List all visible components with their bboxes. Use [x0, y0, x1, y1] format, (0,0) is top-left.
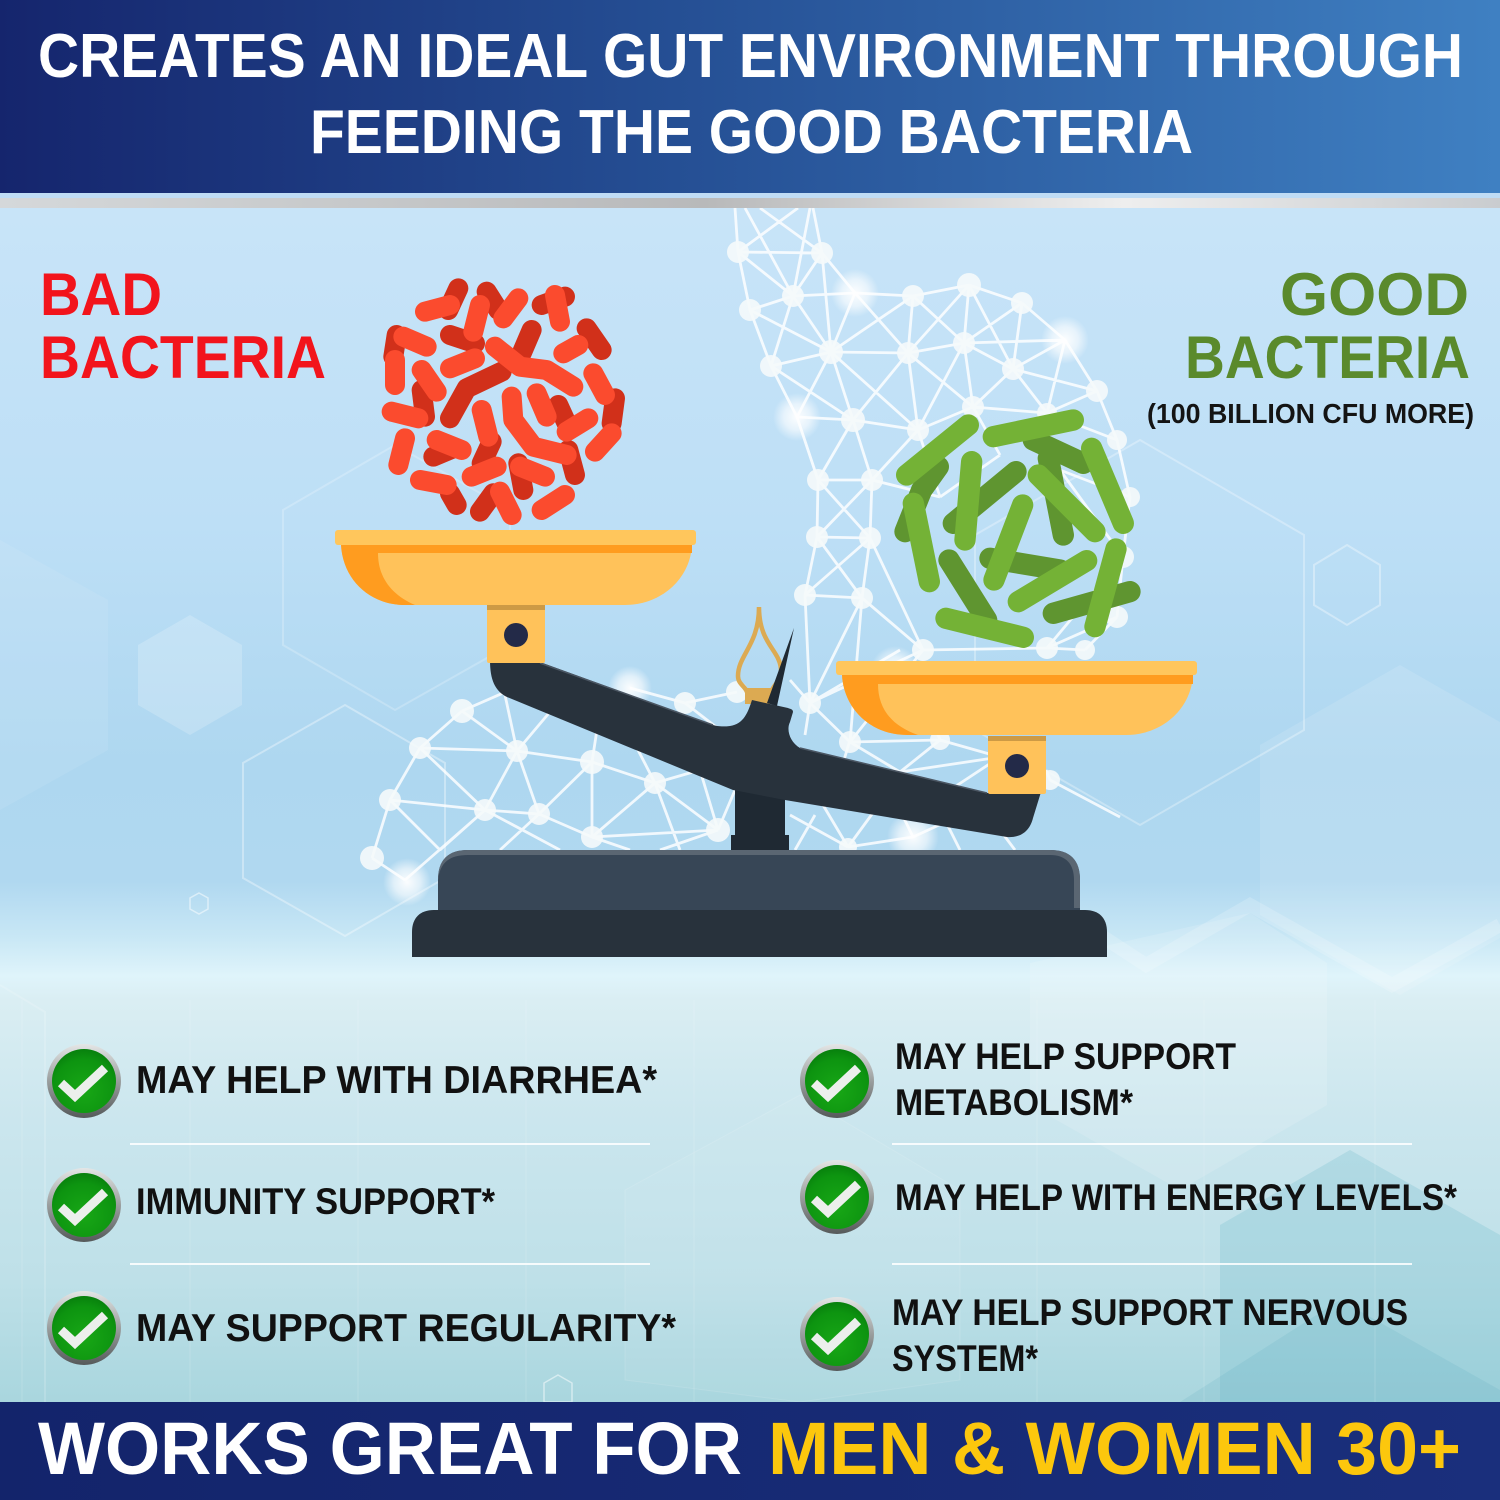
- heading: bad bacteria: BACTERIA: [40, 324, 326, 391]
- beam edge highlight: [540, 663, 987, 793]
- heading: good bacteria: BACTERIA: [1185, 324, 1470, 391]
- gold pointer base: [745, 688, 772, 704]
- illustration: balance scale: [335, 530, 1197, 957]
- left pan mount: [487, 605, 545, 663]
- item: metabolism: [800, 1036, 1236, 1123]
- beam: [490, 660, 1041, 837]
- heading: good bacteria: [1147, 261, 1474, 429]
- title: [38, 22, 1463, 167]
- scale base lower: [412, 910, 1107, 957]
- light strip under header: [0, 193, 1500, 198]
- footer text: [38, 1407, 1461, 1490]
- benefits list: right column: [800, 1036, 1458, 1379]
- item: regularity: [47, 1291, 677, 1365]
- heading: good bacteria: GOOD: [1280, 261, 1469, 328]
- item: nervous system: SYSTEM*: [892, 1338, 1039, 1379]
- item: energy: [800, 1160, 1458, 1234]
- benefits list: left column: [47, 1044, 677, 1365]
- silver divider band: [0, 198, 1500, 208]
- background: molecular network gut shape: [360, 208, 1140, 906]
- gold pointer ornament: [738, 607, 781, 692]
- background: lower band: [0, 1000, 1500, 1402]
- background: sky gradient: [0, 208, 1500, 1000]
- needle: [767, 628, 794, 706]
- right pan: [836, 661, 1197, 735]
- item: nervous system: MAY HELP SUPPORT NERVOUS: [892, 1292, 1408, 1333]
- scale pillar: [731, 785, 789, 850]
- item: diarrhea: MAY HELP WITH DIARRHEA*: [136, 1059, 658, 1102]
- footer text: MEN & WOMEN 30+: [768, 1407, 1461, 1490]
- title: FEEDING THE GOOD BACTERIA: [310, 98, 1193, 167]
- scale base upper: [438, 850, 1080, 910]
- item: metabolism: MAY HELP SUPPORT: [895, 1036, 1236, 1077]
- left pan: [335, 530, 696, 605]
- background: hexagon pattern: [0, 440, 1500, 1402]
- item: regularity: MAY SUPPORT REGULARITY*: [136, 1307, 677, 1350]
- item: immunity: IMMUNITY SUPPORT*: [136, 1181, 496, 1222]
- header bar: [0, 0, 1500, 193]
- footer text: WORKS GREAT FOR: [38, 1407, 742, 1490]
- item: diarrhea: [47, 1044, 658, 1118]
- item: metabolism: METABOLISM*: [895, 1082, 1134, 1123]
- item: nervous system: [800, 1292, 1408, 1379]
- illustration: green good bacteria cluster: [905, 420, 1130, 637]
- right pan mount: [988, 736, 1046, 794]
- scale base highlight: [438, 850, 1080, 908]
- illustration: red bad bacteria cluster: [392, 288, 615, 515]
- footer bar: [0, 1402, 1500, 1500]
- heading: bad bacteria: [40, 261, 326, 391]
- heading: bad bacteria: BAD: [40, 261, 162, 328]
- heading: good bacteria: (100 BILLION CFU MORE): [1147, 398, 1474, 429]
- item: immunity: [47, 1168, 496, 1242]
